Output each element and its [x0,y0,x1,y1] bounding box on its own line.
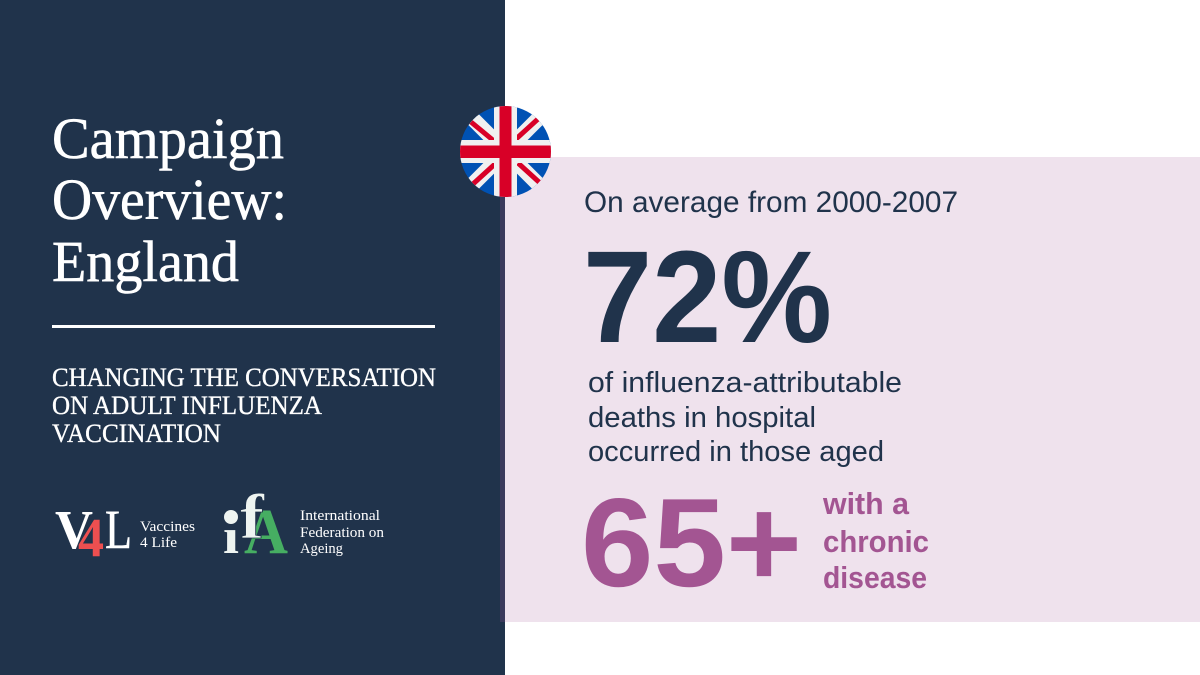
icon: UK flag [460,106,551,197]
logo: International Federation on Ageing: Federation on [300,525,384,541]
title: Campaign [52,106,284,171]
callout: with a chronic disease [822,486,929,595]
logo: International Federation on Ageing [223,481,384,568]
panel: panel overlap strip [500,157,505,622]
stat description [588,367,902,468]
subtitle: VACCINATION [52,419,221,448]
callout: with a chronic disease: with a [822,486,910,521]
big stat: 65+: 65+ [581,472,802,613]
logo: Vaccines 4 Life [55,499,195,568]
title [52,106,287,294]
stat description: occurred in those aged [588,436,884,468]
logo: Vaccines 4 Life: 4 Life [140,535,177,551]
logo: International Federation on Ageing: ı [223,508,239,564]
big stat: 72%: 72% [583,223,832,370]
stat description: deaths in hospital [588,402,816,434]
logo: Vaccines 4 Life: 4 [78,507,104,568]
panel: pink statistic panel [500,157,1200,622]
logo: International Federation on Ageing: f [240,481,265,552]
logo: International Federation on Ageing: International [300,508,380,524]
subtitle: CHANGING THE CONVERSATION [52,363,436,392]
panel: navy sidebar [0,0,505,675]
callout: with a chronic disease: disease [823,560,927,595]
title divider rule [52,325,435,328]
title: England [52,229,239,294]
stat intro text: On average from 2000-2007 [584,186,958,219]
title: Overview: [52,167,287,232]
logo: International Federation on Ageing: Ageing [300,541,343,557]
logo: Vaccines 4 Life: Vaccines [140,519,195,535]
logo: International Federation on Ageing: A [244,496,288,568]
stat description: of influenza-attributable [588,367,902,399]
logo: Vaccines 4 Life: V [55,499,93,560]
logo: Vaccines 4 Life: L [105,499,132,560]
subtitle [52,363,436,448]
subtitle: ON ADULT INFLUENZA [52,391,322,420]
callout: with a chronic disease: chronic [823,524,929,559]
